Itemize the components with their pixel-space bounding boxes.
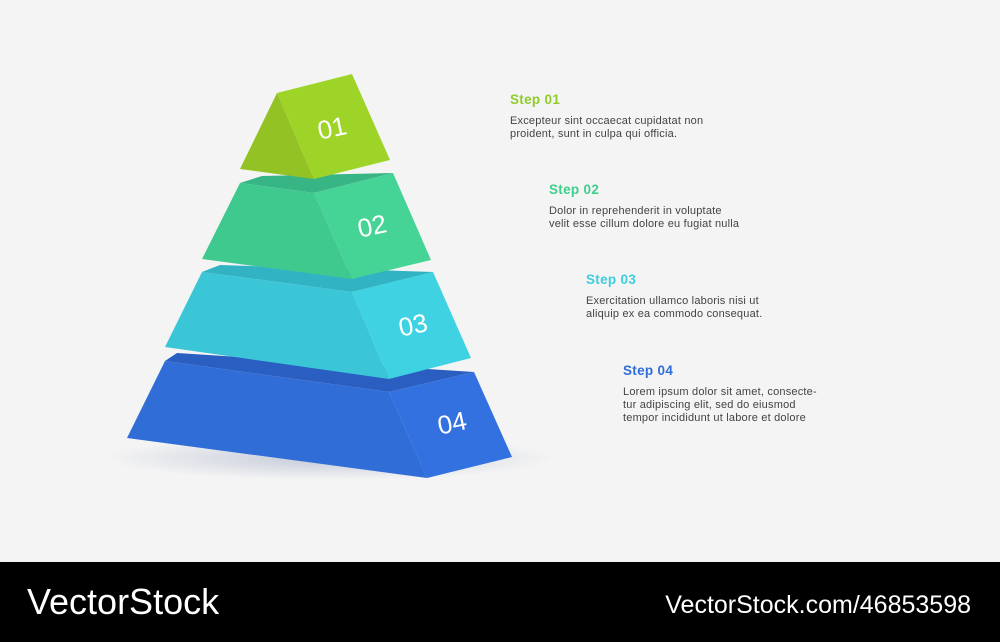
pyramid bbox=[105, 74, 555, 480]
footer band: VectorStock.com/46853598 bbox=[665, 591, 971, 619]
tier 2 bbox=[202, 173, 431, 279]
tier 4 bbox=[127, 353, 512, 478]
step 01 text: Excepteur sint occaecat cupidatat non bbox=[510, 115, 703, 127]
footer band: VectorStock bbox=[27, 581, 220, 622]
step 04 text: Step 04 bbox=[623, 363, 673, 378]
step 03 text: aliquip ex ea commodo consequat. bbox=[586, 308, 762, 320]
step 02 text: velit esse cillum dolore eu fugiat nulla bbox=[549, 218, 740, 230]
step 04 text: tempor incididunt ut labore et dolore bbox=[623, 412, 806, 424]
step 04 text bbox=[623, 363, 817, 424]
footer band bbox=[0, 562, 1000, 642]
step 03 text: Step 03 bbox=[586, 272, 636, 287]
step 02 text bbox=[549, 182, 740, 230]
step 02 text: Dolor in reprehenderit in voluptate bbox=[549, 205, 722, 217]
step 04 text: Lorem ipsum dolor sit amet, consecte- bbox=[623, 386, 817, 398]
tier 2: 02 bbox=[355, 208, 389, 244]
tier 1: 01 bbox=[315, 110, 349, 146]
step 01 text: Step 01 bbox=[510, 92, 560, 107]
tier 3 bbox=[165, 265, 471, 379]
tier 3: 03 bbox=[396, 307, 430, 343]
step 03 text bbox=[586, 272, 762, 320]
step 04 text: tur adipiscing elit, sed do eiusmod bbox=[623, 399, 796, 411]
step 01 text bbox=[510, 92, 703, 140]
step 02 text: Step 02 bbox=[549, 182, 599, 197]
tier 4: 04 bbox=[435, 405, 469, 441]
step 01 text: proident, sunt in culpa qui officia. bbox=[510, 128, 677, 140]
step 03 text: Exercitation ullamco laboris nisi ut bbox=[586, 295, 759, 307]
tier 1 bbox=[240, 74, 390, 179]
